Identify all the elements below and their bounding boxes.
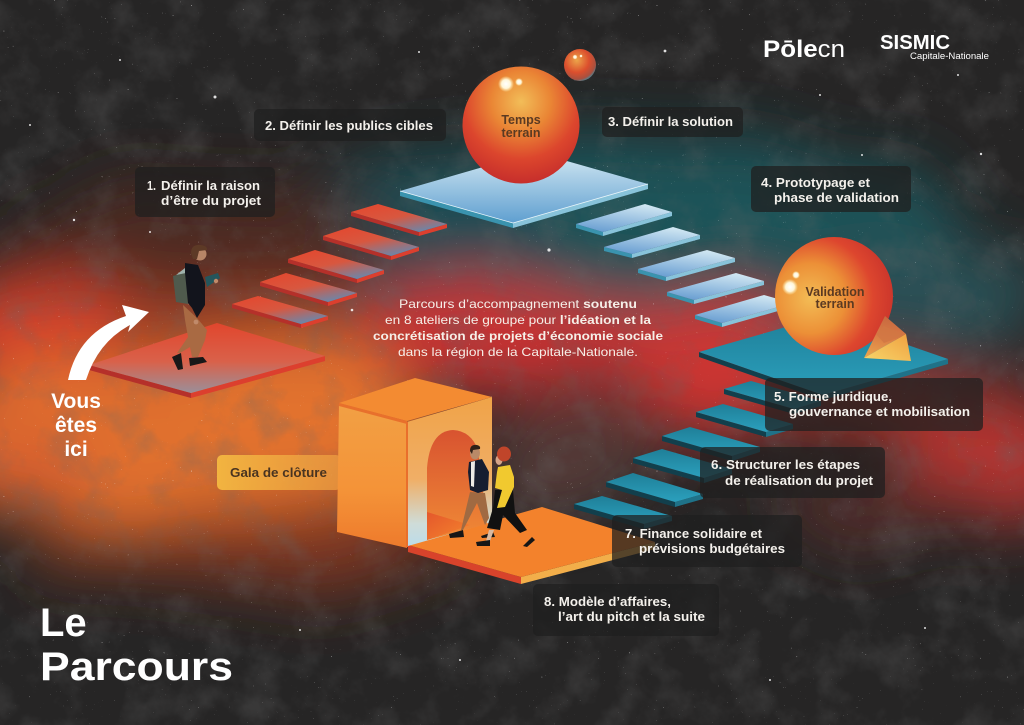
label 1 [135, 167, 275, 217]
central description text: Parcours d’accompagnement soutenu [399, 297, 637, 311]
title: Le [40, 601, 87, 645]
label 2: 2. Définir les publics cibles [265, 119, 433, 133]
label 5: gouvernance et mobilisation [789, 405, 970, 419]
small sphere [564, 49, 596, 81]
platform: teal [699, 316, 948, 400]
label 4: phase de validation [774, 191, 899, 205]
label 4: 4. Prototypage et [761, 176, 871, 190]
sphere: temps terrain [462, 66, 580, 184]
label 6: 6. Structurer les étapes [711, 458, 860, 472]
sphere: validation terrain: Validation [805, 285, 865, 299]
logo: Pôle cn: Pōlecn [763, 36, 845, 63]
icon: prism [864, 316, 911, 361]
sphere: validation terrain [775, 237, 893, 355]
sphere: temps terrain: Temps [501, 113, 541, 127]
label 6 [700, 447, 885, 498]
label 7: prévisions budgétaires [639, 542, 785, 556]
logo: SISMIC: Capitale-Nationale [910, 51, 989, 61]
text: you are here [51, 390, 101, 461]
label 8 [533, 584, 719, 636]
label 5 [765, 378, 983, 431]
title [40, 601, 233, 689]
platform: start (red) [89, 323, 325, 398]
text: you are here: êtes [55, 414, 97, 437]
central description text: en 8 ateliers de groupe pour l’idéation et la [385, 313, 651, 327]
text: you are here: ici [64, 438, 88, 461]
arrow: you are here [68, 305, 149, 380]
label 1: 1. [147, 179, 156, 193]
label 3: 3. Définir la solution [608, 115, 733, 129]
label 7: 7. Finance solidaire et [625, 527, 763, 541]
central description text [373, 297, 663, 359]
central description text: concrétisation de projets d’économie sociale [373, 329, 663, 343]
teal steps [574, 381, 821, 529]
orange platform [408, 507, 655, 584]
label 3 [602, 107, 743, 137]
gateway cube with arch [337, 378, 492, 548]
title: Parcours [40, 645, 233, 689]
sphere: validation terrain: terrain [816, 297, 854, 311]
logo: SISMIC: SISMIC [880, 32, 950, 54]
gala label [217, 455, 341, 490]
label 6: de réalisation du projet [725, 474, 874, 488]
label 4 [751, 166, 911, 212]
label 5: 5. Forme juridique, [774, 390, 892, 404]
label 7 [612, 515, 802, 567]
sphere: temps terrain: terrain [502, 126, 540, 140]
figure: walker [172, 245, 220, 370]
red steps 1 to 5 [232, 204, 447, 328]
figures: couple [449, 445, 535, 547]
label 1: Définir la raison [161, 179, 260, 193]
blue steps [576, 204, 792, 327]
central description text: dans la région de la Capitale-Nationale. [398, 345, 638, 359]
label 8: 8. Modèle d’affaires, [544, 595, 671, 609]
label 8: l’art du pitch et la suite [558, 610, 705, 624]
platform: blue top [400, 152, 648, 228]
text: you are here: Vous [51, 390, 101, 413]
label 1: d’être du projet [161, 194, 262, 208]
label 2 [254, 109, 446, 141]
gala label: Gala de clôture [230, 466, 327, 480]
logo: SISMIC [880, 32, 989, 61]
